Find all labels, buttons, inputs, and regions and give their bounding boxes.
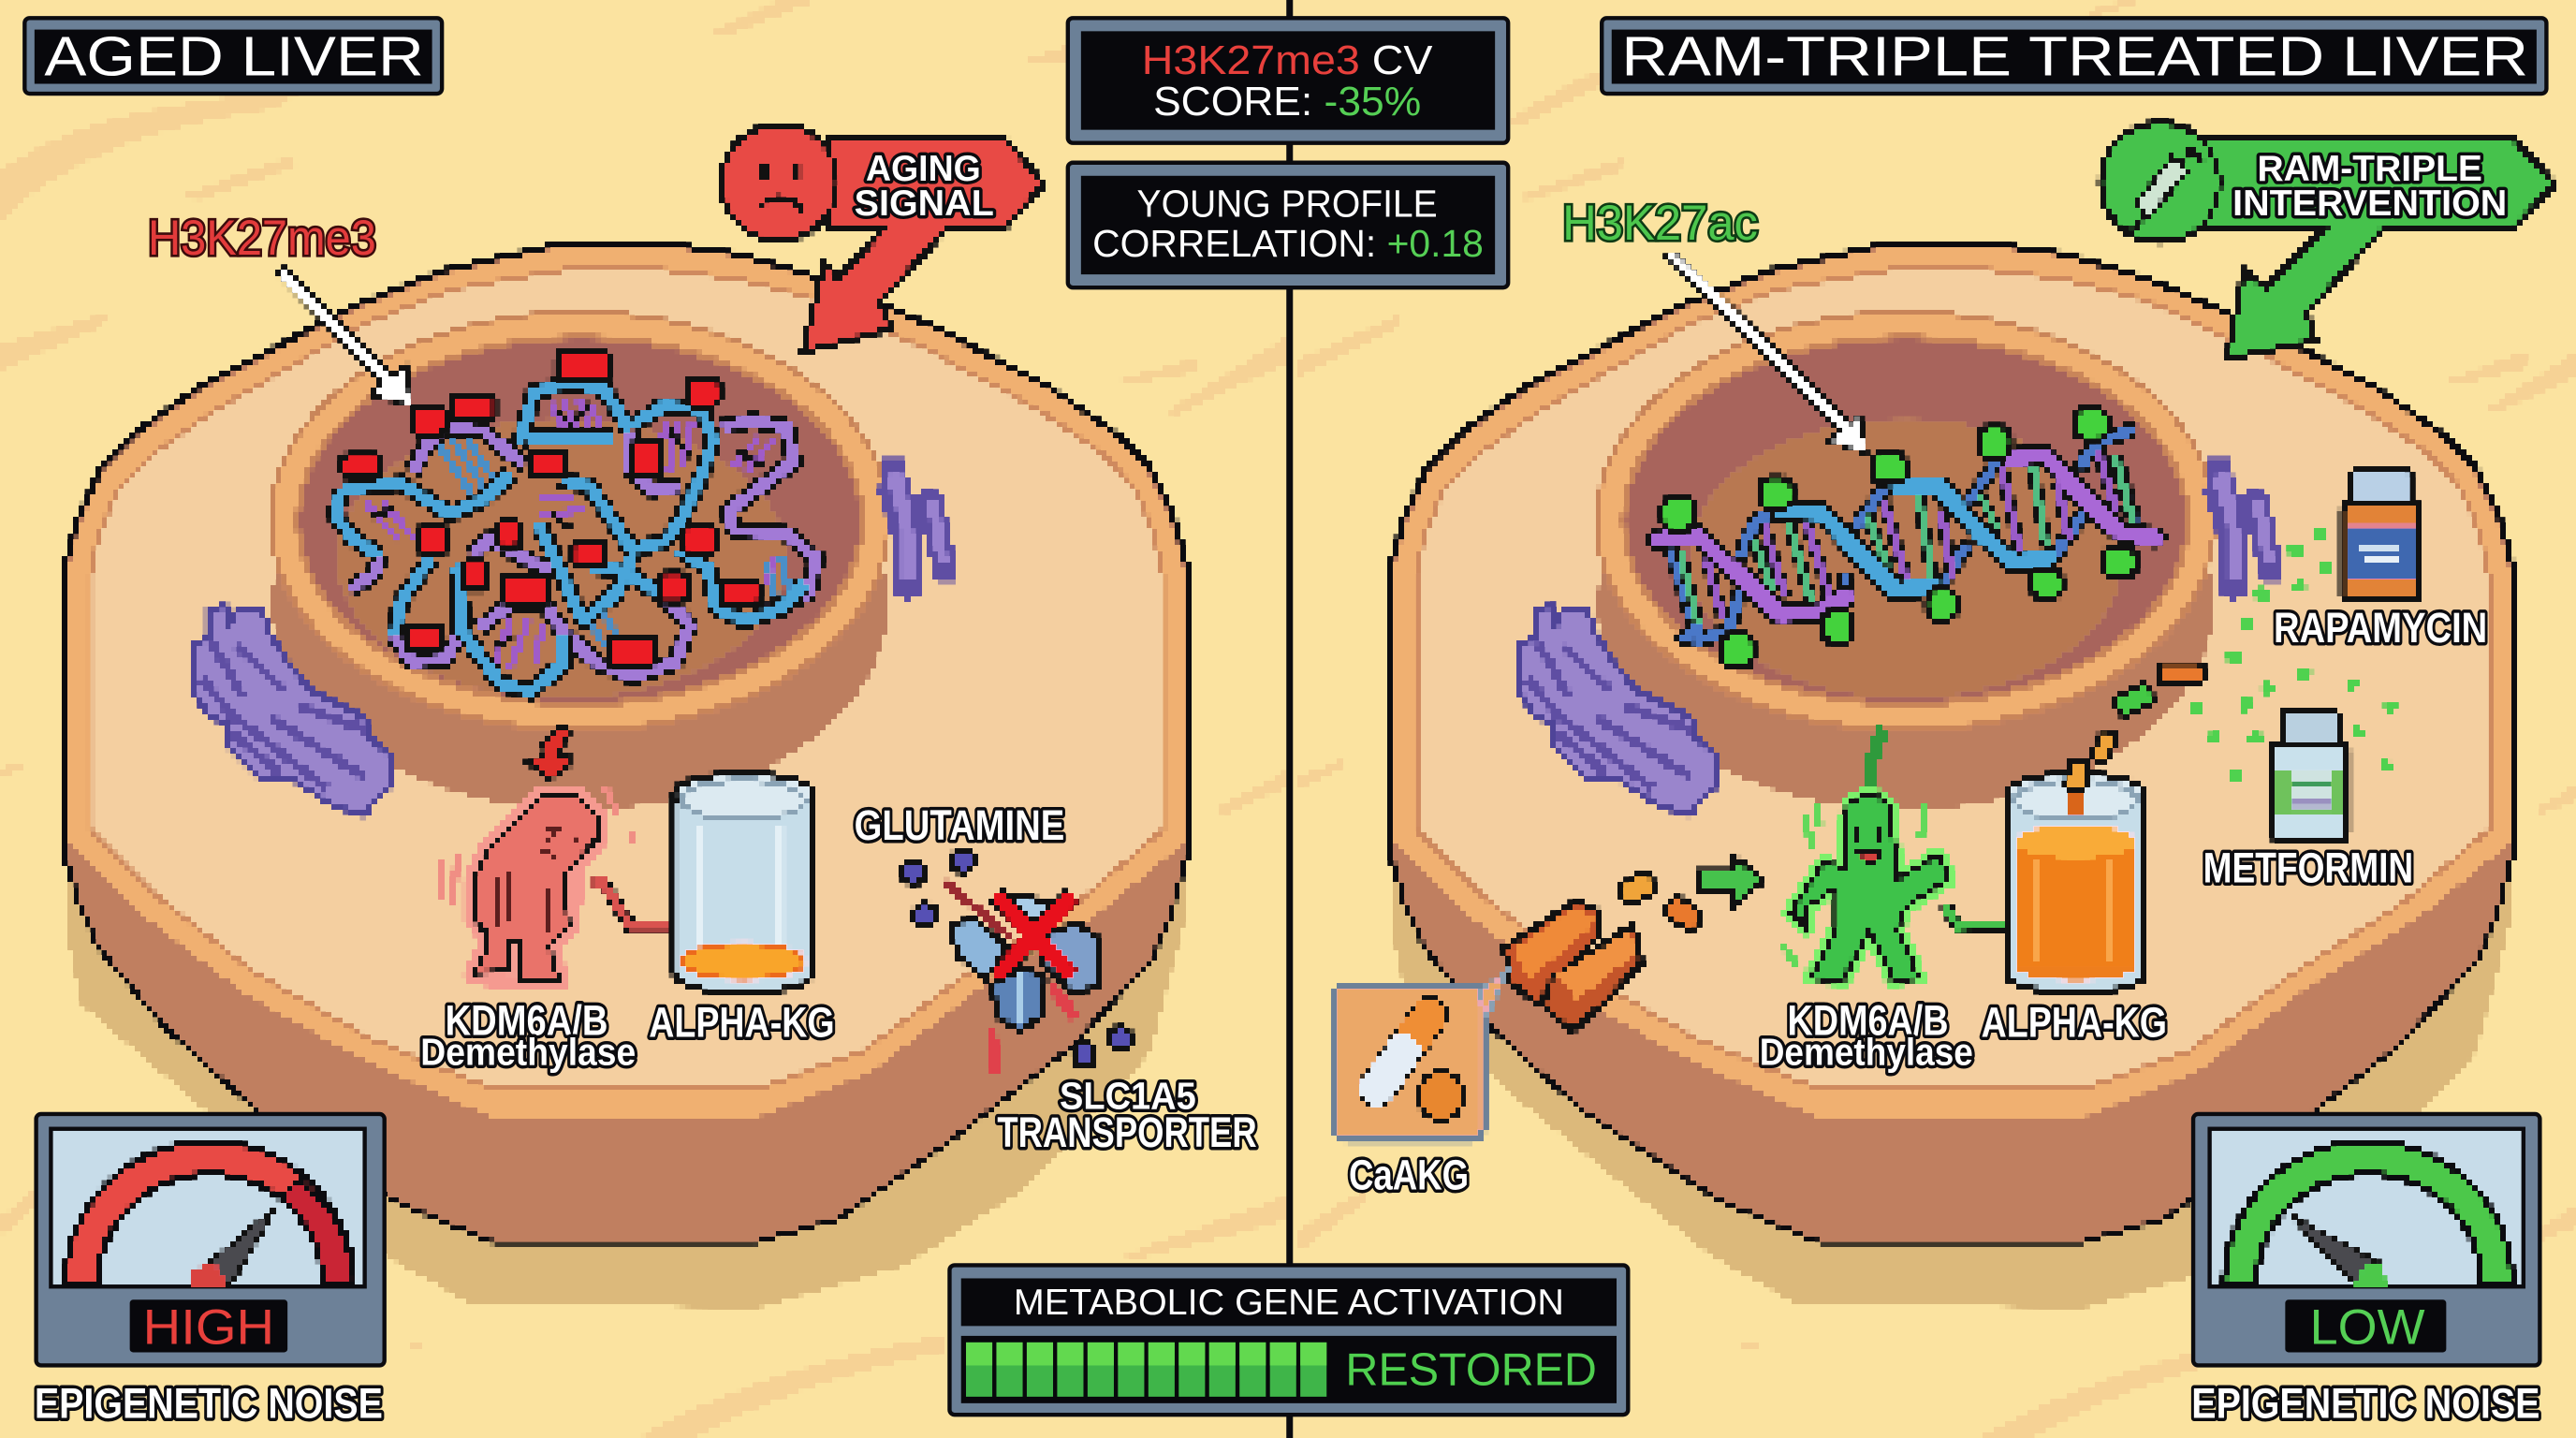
CaAKG pills inbound [1617,871,1704,932]
left cell labels: TRANSPORTER [997,1108,1257,1156]
drug particles [2190,528,2396,782]
orange transporter [1505,902,1641,1030]
nucleus base [271,399,889,810]
stat panel: CV score [1068,18,1508,143]
arrow: white to helix [1666,252,1866,453]
golgi large right [1519,607,1719,815]
stat panel: CV score: H3K27me3 CV [1142,37,1433,83]
right cell labels: RAPAMYCIN [2274,604,2487,652]
right cell labels [1349,604,2487,1199]
cell shadow [66,822,1186,1308]
gauge: low noise: LOW [2310,1300,2425,1356]
left cell labels: GLUTAMINE [855,801,1064,849]
gauge dial [66,1142,353,1284]
nucleus interior [298,337,862,705]
right cell labels: METFORMIN [2203,844,2413,891]
purple strands [350,420,816,677]
cell surface rim [1395,246,2509,1117]
H3K27me3 red marks [342,353,759,664]
panel: aged liver cell [66,243,1186,1308]
right cell labels: ALPHA-KG [1982,998,2167,1046]
panel: metabolic gene activation [949,1265,1628,1415]
open DNA helix [1658,431,2156,640]
golgi small right [2204,459,2282,601]
stat panel: CV score: SCORE: -35% [1153,79,1421,125]
helix back strands [1671,431,2136,640]
chromatin rungs [365,399,788,670]
title: treated liver [1602,18,2546,94]
blue strands [335,383,805,692]
nucleus glow [337,419,787,698]
gauge: high noise: HIGH [143,1300,274,1356]
cell surface [91,268,1164,1090]
green arrow to enzyme [1699,858,1763,903]
aging signal callout [722,125,1043,352]
icon: metformin bottle [2272,712,2348,840]
stat panel: young profile correlation: YOUNG PROFILE [1137,183,1438,226]
gauge: high noise [37,1114,385,1365]
nucleus base [1597,399,2215,810]
arrow banner and syringe [2101,124,2554,359]
cell surface rim [69,246,1183,1117]
right cell labels: Demethylase [1760,1030,1973,1073]
RAM-triple intervention callout [2101,124,2554,359]
panel: treated liver cell [1392,243,2512,1308]
RAM-triple intervention callout: INTERVENTION [2232,183,2507,224]
label: epigenetic noise left: EPIGENETIC NOISE [35,1380,383,1428]
nucleus ring [271,312,889,729]
gauge: low noise [2193,1114,2539,1365]
title: treated liver: RAM-TRIPLE TREATED LIVER [1621,25,2528,88]
panel: metabolic gene activation: RESTORED [1345,1345,1597,1396]
cell shadow [1392,822,2512,1308]
golgi large left [194,607,392,815]
helix rungs [1680,455,2132,621]
helix front strands [1781,487,2049,590]
panel: metabolic gene activation: METABOLIC GENE ACTIVATION [1014,1283,1564,1323]
label: H3K27ac: H3K27ac [1562,196,1758,251]
happy KDM6A/B enzyme [1782,729,2006,979]
left cell labels: ALPHA-KG [649,998,835,1046]
stat panel: young profile correlation: CORRELATION: +0.18 [1092,222,1484,265]
left cell labels: Demethylase [420,1030,636,1073]
right cell labels: CaAKG [1349,1152,1469,1199]
progress bar [966,1343,1326,1397]
alpha-KG beaker low [674,774,812,992]
arrow: white to marks [278,268,411,406]
cell body [1392,243,2512,1242]
label: H3K27me3: H3K27me3 [148,211,376,266]
glutamine dots [902,850,1131,1065]
intervention text: RAM-TRIPLE [2258,149,2482,189]
alpha-KG beaker full [2007,774,2144,992]
title: aged liver [24,18,442,94]
arrow banner and face [722,125,1043,352]
red down arrow [529,726,568,779]
blocked SLC1A5 transporter [944,882,1099,1071]
tangled chromatin DNA [335,383,816,692]
icon: rapamycin bottle [2343,470,2420,600]
nucleus glow [1689,419,2123,698]
golgi small left [879,459,956,601]
aging signal callout: SIGNAL [855,183,994,224]
title: aged liver: AGED LIVER [44,25,424,88]
nucleus ring [1597,312,2215,729]
nucleus interior [1623,337,2188,705]
left cell labels [420,801,1257,1156]
cell body [66,243,1186,1242]
right cell labels: KDM6A/B [1788,997,1949,1045]
H3K27ac green marks [1662,409,2136,668]
left cell labels: KDM6A/B [446,997,607,1045]
gauge dial [2224,1142,2512,1284]
cell surface [1416,268,2489,1090]
stressed KDM6A/B enzyme [440,785,670,983]
signal text: AGING [866,149,981,189]
center divider [1286,0,1293,1438]
falling pills [2066,664,2203,790]
panel: CaAKG icon [1334,970,1508,1140]
stat panel: young profile correlation [1068,163,1508,287]
left cell labels: SLC1A5 [1060,1075,1196,1118]
